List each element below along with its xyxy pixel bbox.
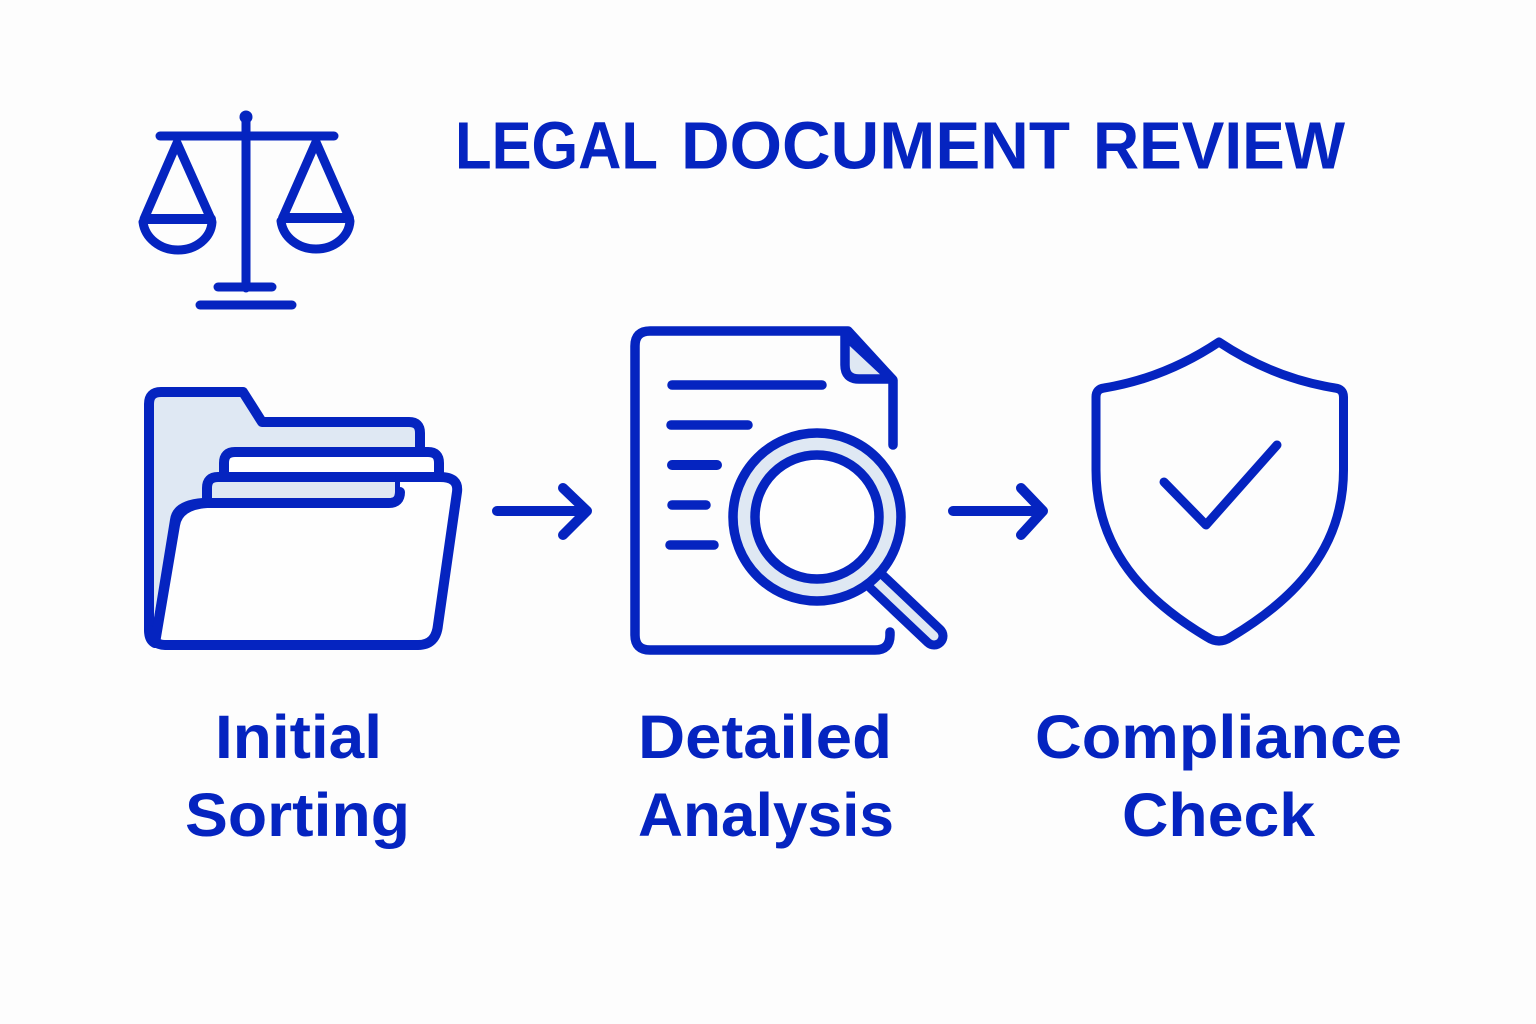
label: initial sorting: Initial [215, 703, 382, 771]
label: detailed analysis: Detailed [638, 703, 892, 771]
label: compliance check: Check [1122, 781, 1315, 849]
icon: shield with check [1096, 342, 1344, 641]
arrow: sorting to analysis [497, 488, 587, 535]
label: detailed analysis [638, 703, 894, 849]
title: DOCUMENT [681, 108, 1070, 184]
title [455, 108, 1346, 184]
icon: folder [149, 392, 457, 645]
arrow: analysis to compliance [953, 488, 1043, 535]
label: initial sorting [185, 703, 410, 849]
label: compliance check [1035, 703, 1402, 849]
title: LEGAL [455, 108, 658, 184]
icon: document with magnifier [635, 331, 934, 650]
label: initial sorting: Sorting [185, 781, 410, 849]
label: compliance check: Compliance [1035, 703, 1402, 771]
icon: scales of justice [143, 110, 350, 305]
label: detailed analysis: Analysis [638, 781, 894, 849]
title: REVIEW [1093, 108, 1346, 184]
